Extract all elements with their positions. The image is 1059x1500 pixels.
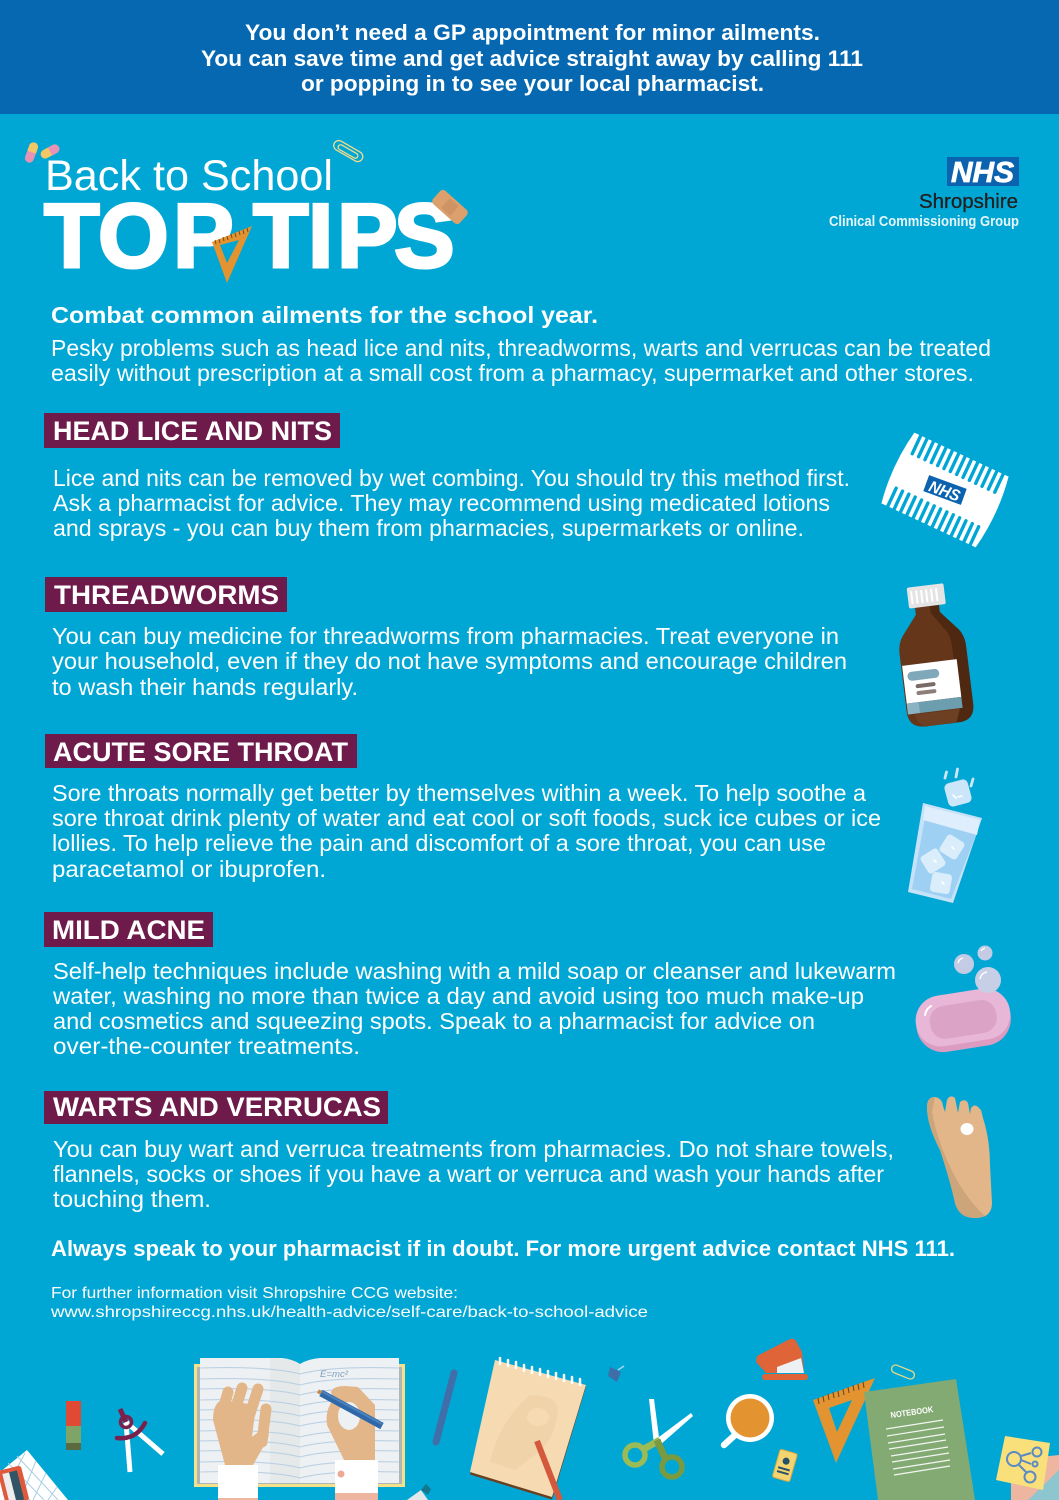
text: head lice [53, 465, 850, 541]
heading: acute sore throat: ACUTE SORE THROAT [53, 737, 349, 767]
text: acute sore throat: paracetamol or ibuprofen. [52, 856, 326, 882]
icon: glue tube [407, 1484, 431, 1500]
panel: head lice and nits [44, 413, 1013, 551]
text: warts and verrucas: You can buy wart and verruca treatments from pharmacies. Do not share towels, [53, 1136, 894, 1162]
intro text: easily without prescription at a small cost from a pharmacy, supermarket and other stores. [51, 360, 974, 386]
illustration: school desk items [0, 1339, 1059, 1500]
icon: graph paper [0, 1450, 68, 1500]
text: acute sore throat: sore throat drink plenty of water and eat cool or soft foods, suck ice cubes or ice [52, 805, 881, 831]
text: head lice: and sprays - you can buy them from pharmacies, supermarkets or online. [53, 515, 804, 541]
icon: notebook: NOTEBOOK [890, 1404, 935, 1420]
icon: sharpener [0, 1465, 29, 1500]
heading: mild acne: MILD ACNE [52, 915, 205, 945]
text: head lice: Ask a pharmacist for advice. They may recommend using medicated lotions [53, 490, 830, 516]
icon: sketch notepad [470, 1358, 586, 1500]
logo: NHS Shropshire CCG: Clinical Commissioning Group [829, 214, 1019, 230]
panel: threadworms [45, 577, 975, 728]
text: warts and verrucas: flannels, socks or shoes if you have a wart or verruca and wash your hands after [53, 1161, 884, 1187]
text: threadworms: your household, even if they do not have symptoms and encourage children [52, 648, 847, 674]
icon: stapler [756, 1339, 808, 1380]
icon: paper clip [332, 139, 365, 163]
top banner: You can save time and get advice straight away by calling 111 [201, 46, 863, 71]
heading: threadworms: THREADWORMS [54, 580, 279, 610]
panel: warts and verrucas [44, 1091, 992, 1218]
icon: glass of iced water [908, 769, 982, 903]
top banner [0, 0, 1059, 114]
icon: open book: E=mc² [320, 1369, 349, 1379]
text: acute sore throat: Sore throats normally get better by themselves within a week. To help soothe a [52, 780, 867, 806]
panel: acute sore throat [45, 734, 982, 903]
closing advice: Always speak to your pharmacist if in doubt. For more urgent advice contact NHS 111. [51, 1236, 955, 1261]
text: mild acne: and cosmetics and squeezing spots. Speak to a pharmacist for advice on [53, 1008, 815, 1034]
icon: left hand [213, 1388, 269, 1500]
icon: medicine bottle [892, 581, 975, 728]
text: mild acne [52, 958, 896, 1059]
logo: NHS Shropshire CCG: NHS [951, 157, 1015, 189]
icon: scissors [625, 1399, 693, 1477]
icon: compass [117, 1409, 163, 1472]
text: acute sore throat: lollies. To help relieve the pain and discomfort of a sore throat, you can use [52, 830, 826, 856]
icon: red pencil [537, 1441, 560, 1500]
text: mild acne: water, washing no more than twice a day and avoid using too much make-up [52, 983, 864, 1009]
heading: warts and verrucas: WARTS AND VERRUCAS [53, 1092, 381, 1122]
text: threadworms: to wash their hands regularly. [52, 674, 358, 700]
icon: nit comb: NHS [926, 478, 963, 505]
icon: pills [24, 141, 61, 164]
further information [50, 1285, 648, 1321]
logo: NHS Shropshire CCG [829, 157, 1019, 230]
text: threadworms: You can buy medicine for threadworms from pharmacies. Treat everyone in [52, 623, 839, 649]
text: warts and verrucas: touching them. [53, 1186, 211, 1212]
icon: sticky note [996, 1436, 1059, 1500]
icon: mug of tea [724, 1394, 774, 1445]
icon: foot with verruca [927, 1096, 992, 1218]
icon: right hand with pen [318, 1386, 382, 1500]
icon: clip and tag [772, 1364, 916, 1482]
icon: blue pencil [436, 1373, 454, 1442]
title: Top Tips [44, 186, 455, 287]
title: Back to School: Back to School [45, 152, 333, 200]
intro text [51, 335, 991, 386]
intro text: Pesky problems such as head lice and nits, threadworms, warts and verrucas can be treated [51, 335, 991, 361]
text: threadworms [52, 623, 847, 700]
further information: www.shropshireccg.nhs.uk/health-advice/self-care/back-to-school-advice [50, 1304, 648, 1321]
title: Top Tips: TIPS [253, 186, 455, 287]
icon: eraser [66, 1401, 81, 1450]
icon: large set square [813, 1378, 875, 1463]
top banner: or popping in to see your local pharmacist. [301, 71, 764, 96]
icon: plaster [431, 188, 469, 226]
icon: push pin [608, 1366, 624, 1382]
text: warts and verrucas [53, 1136, 894, 1212]
text: mild acne: Self-help techniques include washing with a mild soap or cleanser and lukewarm [53, 958, 896, 984]
logo: NHS Shropshire CCG: Shropshire [919, 191, 1018, 213]
icon: soap and bubbles [912, 946, 1015, 1056]
text: acute sore throat [52, 780, 881, 882]
icon: set square [212, 226, 252, 283]
intro heading: Combat common ailments for the school year. [51, 302, 598, 328]
top banner: You don’t need a GP appointment for minor ailments. [245, 20, 820, 45]
icon: open book [194, 1358, 405, 1487]
panel: mild acne [44, 912, 1015, 1059]
text: mild acne: over-the-counter treatments. [53, 1033, 360, 1059]
text: head lice: Lice and nits can be removed by wet combing. You should try this method first. [53, 465, 850, 491]
icon: nit comb [877, 429, 1013, 551]
further information: For further information visit Shropshire CCG website: [51, 1285, 458, 1302]
icon: notebook [864, 1379, 975, 1500]
heading: head lice: HEAD LICE AND NITS [53, 416, 332, 446]
title: Top Tips: TOP [44, 186, 234, 287]
